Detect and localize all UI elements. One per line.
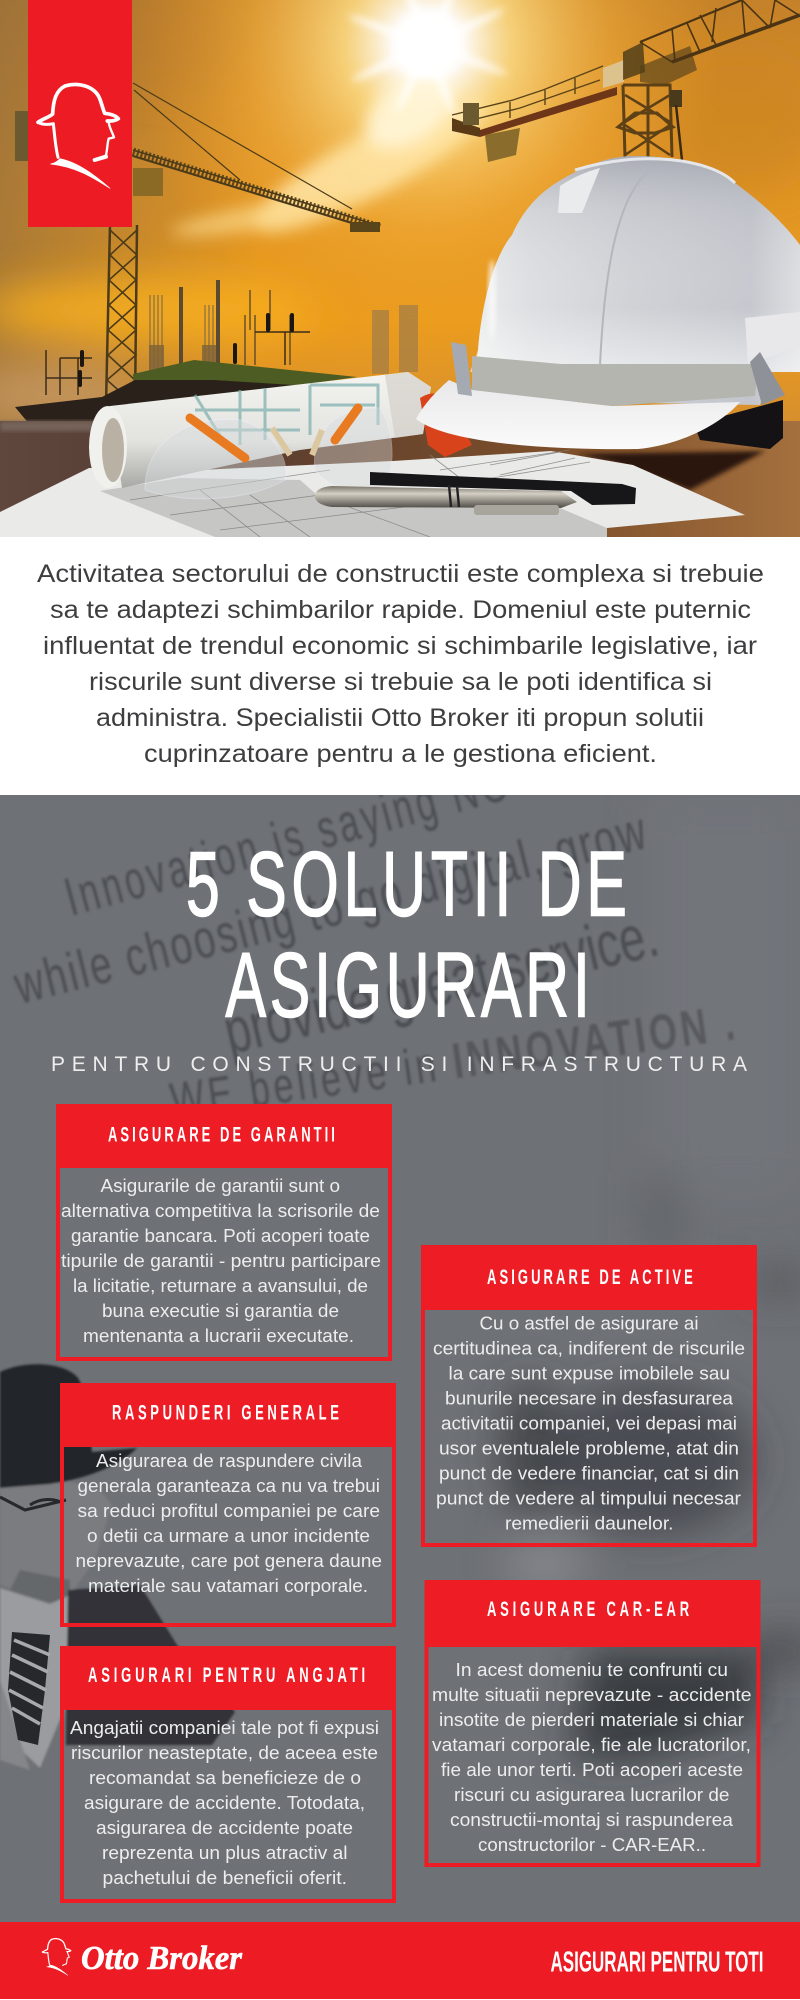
panel: asigurare de garantii	[56, 1104, 392, 1359]
blurred wall lettering: provide great service.	[217, 898, 665, 1067]
panel: asigurare car-ear: riscuri cu asigurarea lucrarilor de	[454, 1785, 730, 1805]
panel: asigurare de active: Cu o astfel de asigurare ai	[480, 1314, 698, 1334]
panel: raspunderi generale	[60, 1383, 396, 1625]
panel: asigurare de garantii: Asigurarile de garantii sunt o	[100, 1176, 340, 1196]
hard hat	[416, 156, 800, 457]
intro text: sa te adaptezi schimbarilor rapide. Domeniul este puternic	[50, 596, 751, 624]
icon: otto broker head logo	[38, 85, 118, 188]
blurred wall lettering: Innovation is saying NO to	[58, 738, 563, 927]
heading: asigurare de garantii: ASIGURARE DE GARANTII	[108, 1122, 335, 1146]
panel: asigurari pentru angajati: pachetului de beneficii oferit.	[102, 1868, 347, 1888]
panel: asigurare car-ear: insotite de pierderi materiale si chiar	[439, 1710, 744, 1730]
intro text	[37, 560, 764, 768]
panel: asigurare de active: remedierii daunelor.	[505, 1514, 674, 1534]
brand name: Otto Broker	[81, 1940, 243, 1977]
safety glasses	[145, 408, 392, 499]
blurred wall lettering: WE believe in INNOVATION .	[167, 996, 738, 1129]
panel: asigurare de active: certitudinea ca, indiferent de riscurile	[433, 1338, 745, 1358]
panel: asigurari pentru angajati: asigurare de accidente. Totodata,	[84, 1793, 365, 1813]
panel: asigurare de garantii: mentenanta a lucrarii executate.	[83, 1326, 354, 1346]
subtitle: PENTRU CONSTRUCTII SI INFRASTRUCTURA	[51, 1053, 747, 1076]
panel: asigurare car-ear: constructorilor - CAR-EAR..	[478, 1835, 706, 1855]
grey photo background	[0, 738, 800, 1922]
building under construction	[15, 280, 418, 425]
heading: asigurare de active: ASIGURARE DE ACTIVE	[487, 1265, 693, 1289]
panel: asigurare car-ear: In acest domeniu te confrunti cu	[456, 1660, 728, 1680]
pens	[315, 472, 636, 515]
panel: asigurare de active: punct de vedere al timpului necesar	[436, 1488, 741, 1508]
panel: asigurare de active	[421, 1245, 757, 1545]
man in bowler hat	[0, 1364, 235, 1770]
panel: asigurare de garantii: tipurile de garantii - pentru participare	[61, 1251, 381, 1271]
tagline: ASIGURARI PENTRU TOTI	[550, 1946, 764, 1979]
right crane	[452, 0, 800, 162]
panel: asigurare de garantii: la licitatie, returnare a avansului, de	[73, 1276, 368, 1296]
panel: raspunderi generale: Asigurarea de raspundere civila	[96, 1451, 363, 1471]
logo panel	[28, 0, 132, 227]
panel: asigurare de active: activitatii companiei, vei depasi mai	[441, 1414, 737, 1434]
panel: asigurare de garantii: alternativa competitiva la scrisorile de	[61, 1201, 380, 1221]
panel: raspunderi generale: sa reduci profitul companiei pe care	[78, 1501, 380, 1521]
panel: asigurare de active: la care sunt expuse imobilele sau	[448, 1364, 730, 1384]
heading: asigurare car-ear: ASIGURARE CAR-EAR	[487, 1597, 689, 1621]
panel: asigurare car-ear: constructii-montaj si raspunderea	[450, 1810, 734, 1830]
intro text: cuprinzatoare pentru a le gestiona eficient.	[144, 740, 657, 768]
panel: asigurari pentru angajati: riscurilor neasteptate, de aceea este	[71, 1743, 378, 1763]
panel: raspunderi generale: o detii ca urmare a unor incidente	[87, 1526, 370, 1546]
hero photo: construction site at sunset	[0, 0, 800, 537]
blurred wall lettering: while choosing to go digital, grow	[7, 799, 652, 1015]
panel: asigurare car-ear: multe situatii neprevazute - accidente	[432, 1685, 752, 1705]
title	[186, 832, 627, 1037]
panel: asigurare de active: bunurile necesare in desfasurarea	[445, 1388, 734, 1408]
icon: small head logo	[42, 1939, 71, 1975]
panel: asigurare car-ear: vatamari corporale, fie ale lucratorilor,	[432, 1735, 751, 1755]
footer bar	[0, 1922, 800, 1999]
intro text: Activitatea sectorului de constructii este complexa si trebuie	[37, 560, 764, 588]
panel: asigurari pentru angajati: reprezenta un plus atractiv al	[102, 1843, 348, 1863]
title: ASIGURARI	[226, 933, 590, 1037]
table	[0, 421, 800, 537]
heading: asigurari pentru angjati: ASIGURARI PENTRU ANGJATI	[88, 1663, 365, 1687]
panel: asigurari pentru angajati: recomandat sa beneficieze de o	[89, 1768, 361, 1788]
panel: raspunderi generale: materiale sau vatamari corporale.	[88, 1576, 368, 1596]
panel: asigurari pentru angajati: asigurarea de accidente poate	[96, 1818, 353, 1838]
panel: asigurare de garantii: buna executie si garantia de	[102, 1301, 339, 1321]
panel: asigurari pentru angajati	[60, 1646, 396, 1901]
intro text: administra. Specialistii Otto Broker iti propun solutii	[96, 704, 704, 732]
panel: asigurari pentru angajati: Angajatii companiei tale pot fi expusi	[70, 1718, 379, 1738]
intro text: influentat de trendul economic si schimbarile legislative, iar	[43, 632, 757, 660]
panel: raspunderi generale: generala garanteaza ca nu va trebui	[78, 1476, 380, 1496]
blueprint sheets	[0, 451, 745, 537]
rolled blueprint	[89, 372, 431, 488]
panel: raspunderi generale: neprevazute, care pot genera daune	[76, 1551, 382, 1571]
panel: asigurare car-ear: fie ale unor terti. Poti acoperi aceste	[441, 1760, 743, 1780]
panel: asigurare de active: punct de vedere financiar, cat si din	[439, 1464, 739, 1484]
title: 5 SOLUTII DE	[186, 832, 627, 936]
panel: asigurare de garantii: garantie bancara. Poti acoperi toate	[71, 1226, 370, 1246]
heading: raspunderi generale: RASPUNDERI GENERALE	[112, 1400, 339, 1424]
left crane	[15, 83, 380, 405]
panel: asigurare de active: usor eventualele probleme, atat din	[439, 1438, 739, 1458]
intro text: riscurile sunt diverse si trebuie sa le poti identifica si	[89, 668, 712, 696]
blurred wall lettering	[12, 795, 734, 1104]
panel: asigurare car-ear	[424, 1580, 760, 1865]
